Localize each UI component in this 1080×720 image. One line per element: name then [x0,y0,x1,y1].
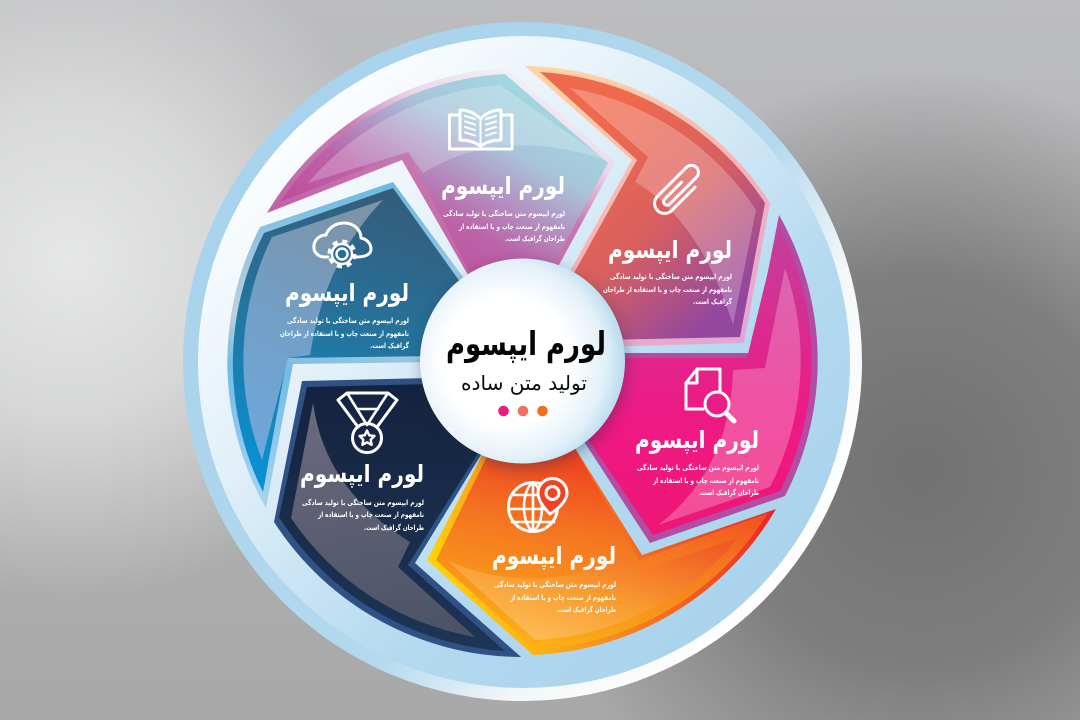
text: red segment: نامفهوم از صنعت چاپ و با استفاده از [509,593,616,602]
heading: navy segment: لورم ایپسوم [300,460,424,488]
text: purple segment: لورم ایپسوم متن ساختگی با تولید سادگی [443,209,565,218]
text: navy segment: طراحان گرافیک است. [364,523,424,532]
heading: purple segment: لورم ایپسوم [441,172,565,200]
text: purple segment [443,209,565,243]
text: magenta segment [637,463,759,497]
text: magenta segment: لورم ایپسوم متن ساختگی با تولید سادگی [637,463,759,472]
text: blue segment: نامفهوم از صنعت چاپ و با استفاده از طراحان [280,329,409,338]
text: purple segment: نامفهوم از صنعت چاپ و با استفاده از [458,222,565,231]
heading: orange segment: لورم ایپسوم [608,236,732,264]
text: navy segment: لورم ایپسوم متن ساختگی با تولید سادگی [302,498,424,507]
text: orange segment: گرافیک است. [693,297,733,306]
heading: magenta segment: لورم ایپسوم [635,426,759,454]
text: blue segment [280,316,410,350]
heading: red segment: لورم ایپسوم [492,542,616,570]
icon: cloud with gear [314,223,371,266]
icon: globe with pin [508,478,567,532]
text: blue segment: گرافیک است. [370,341,410,350]
panel: purple book segment [267,68,615,300]
panel: blue cloud segment [227,182,480,508]
text: red segment [494,580,616,614]
text: magenta segment: نامفهوم از صنعت چاپ و با استفاده از [652,476,759,485]
panel: red orange globe segment [427,440,776,655]
text: navy segment: نامفهوم از صنعت چاپ و با استفاده از [317,510,424,519]
icon: document with magnifier [686,369,734,421]
icon: open book [450,110,512,149]
text: red segment: لورم ایپسوم متن ساختگی با تولید سادگی [494,580,616,589]
panel: orange paperclip segment [525,66,770,347]
text: orange segment: لورم ایپسوم متن ساختگی با تولید سادگی [610,272,732,281]
text: navy segment [302,498,424,532]
panel: magenta document segment [570,215,818,543]
panel: navy medal segment [274,378,521,657]
center circle [420,258,627,469]
text: orange segment [603,272,733,306]
center subtitle: تولید متن ساده [461,371,587,395]
three dots [498,406,548,416]
text: blue segment: لورم ایپسوم متن ساختگی با تولید سادگی [287,316,409,325]
text: orange segment: نامفهوم از صنعت چاپ و با استفاده از طراحان [603,285,732,294]
text: magenta segment: طراحان گرافیک است. [699,488,759,497]
icon: medal [338,393,397,452]
center title: لورم ایپسوم [446,324,606,364]
outer disk [183,22,862,701]
text: purple segment: طراحان گرافیک است. [505,234,565,243]
icon: paperclip [650,162,706,218]
text: red segment: طراحان گرافیک است. [556,605,616,614]
heading: blue segment: لورم ایپسوم [285,279,409,307]
